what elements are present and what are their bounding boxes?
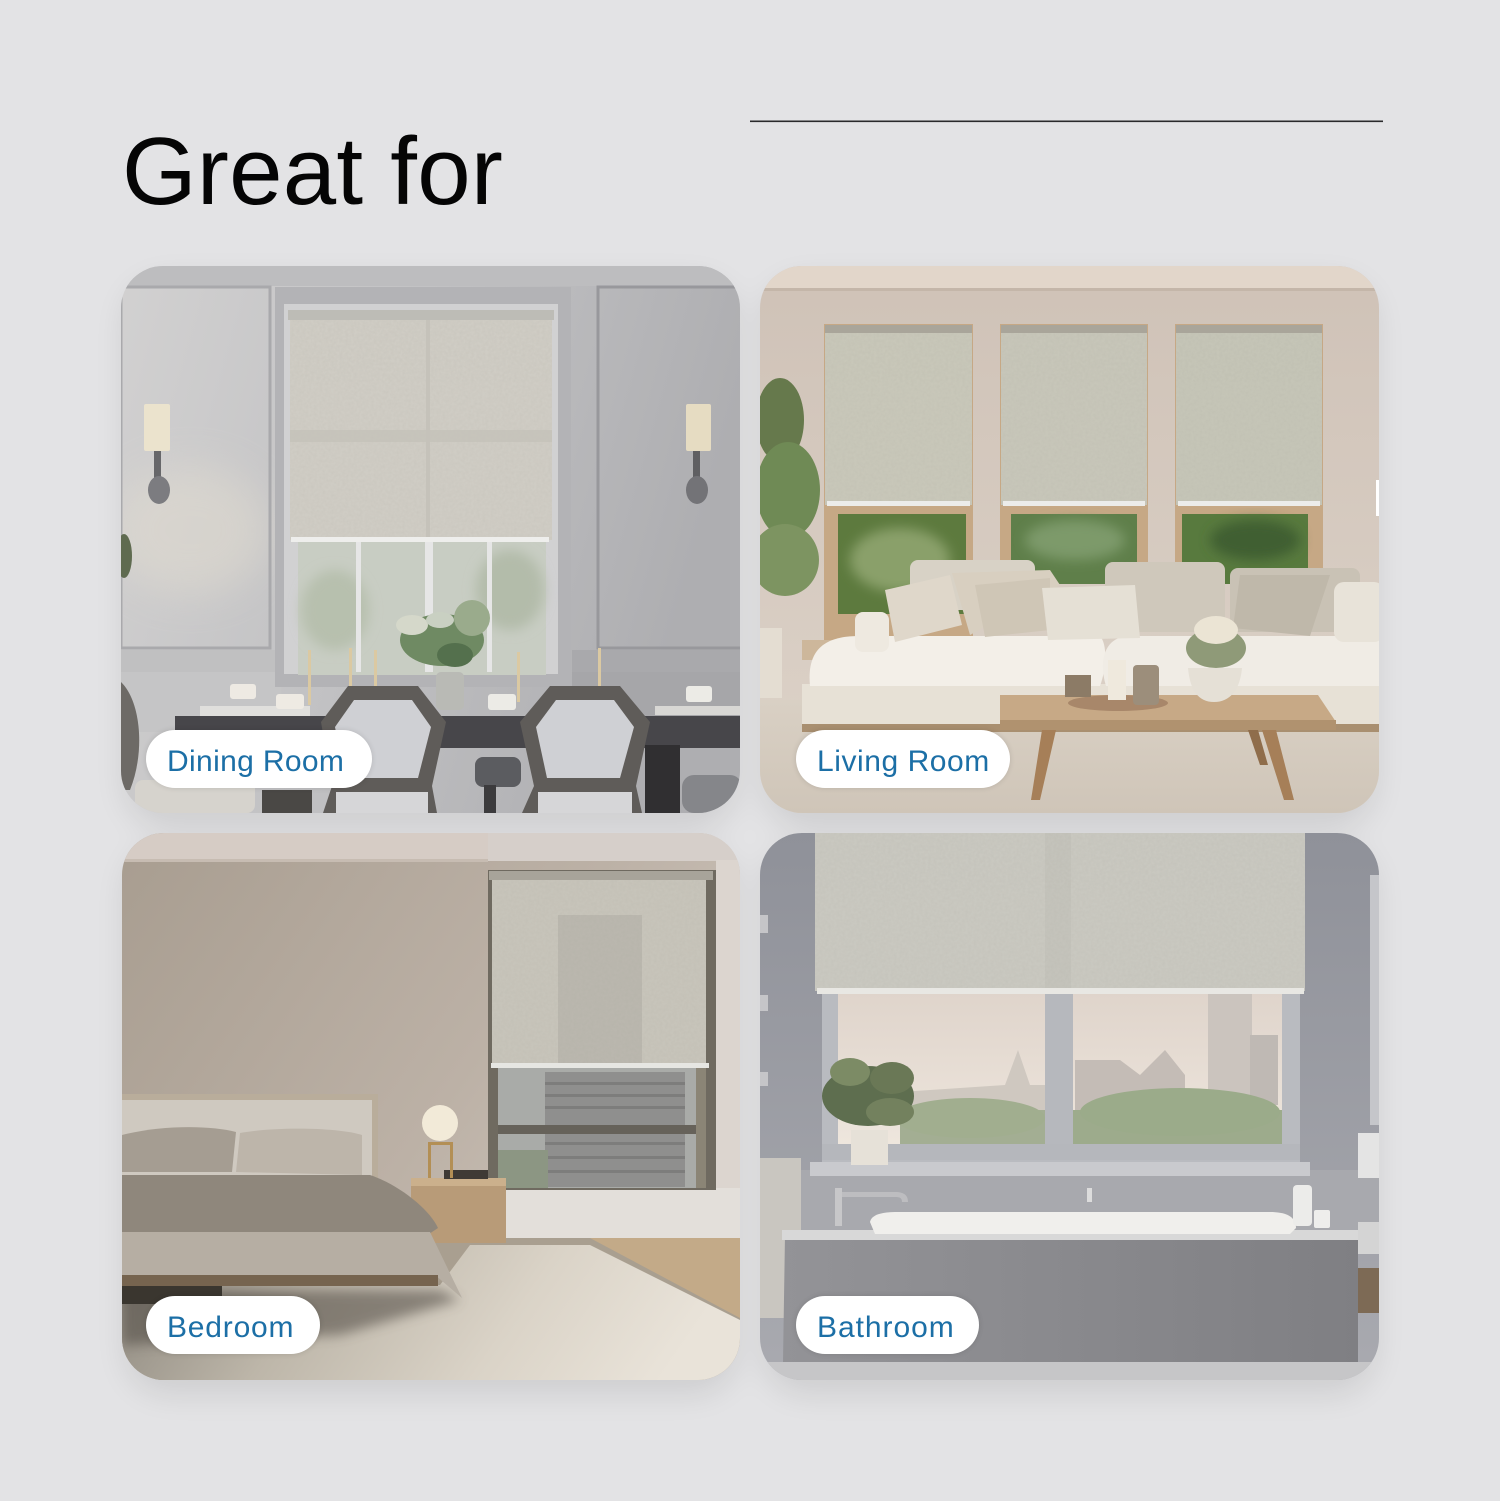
bedroom ledge: [506, 1188, 740, 1238]
panel: living room: [751, 266, 1384, 813]
plant at left edge: [121, 534, 132, 578]
label: Bathroom: Bathroom: [817, 1311, 955, 1344]
bedroom blind: [489, 871, 713, 1068]
card shadows: [125, 280, 1375, 1394]
windows: [824, 324, 1323, 640]
bedroom window: [488, 870, 716, 1190]
label: Living Room: [796, 730, 1010, 788]
panel: bedroom: [122, 833, 740, 1380]
bathtub: [782, 1185, 1359, 1362]
title: Great for: [122, 118, 503, 225]
panel: bathroom: [760, 833, 1379, 1380]
sconces: [144, 404, 170, 451]
bed: [122, 1094, 462, 1304]
bathroom sill: [810, 1162, 1310, 1176]
bedroom photo: [122, 833, 740, 1380]
label: Dining Room: [146, 730, 372, 788]
left cabinet: [760, 1158, 801, 1318]
planter: [760, 628, 782, 698]
dining room photo: [110, 266, 748, 813]
chair right: [520, 686, 650, 813]
dining blind: [290, 312, 552, 540]
bathroom photo: [760, 833, 1379, 1380]
tree: [760, 378, 820, 596]
label: Dining Room: Dining Room: [167, 745, 344, 778]
dining window frame: [275, 287, 571, 687]
flower arrangement: [396, 600, 490, 696]
chair left: [321, 686, 446, 813]
label: Living Room: Living Room: [817, 745, 990, 778]
nightstand and lamp: [411, 1105, 506, 1243]
bed shadow on rug: [122, 1290, 460, 1345]
header rule: [750, 120, 1383, 122]
bathroom window: [822, 990, 1300, 1162]
floor: [760, 749, 1379, 813]
table: [175, 716, 745, 748]
bedroom floor: [122, 1238, 740, 1380]
panel: dining room: [110, 266, 748, 813]
sofa: [802, 560, 1384, 732]
rug: [122, 1245, 740, 1380]
label: Bathroom: [796, 1296, 979, 1354]
coffee table: [1000, 616, 1336, 800]
bathroom blind: [815, 833, 1305, 994]
blinds: [825, 325, 1322, 506]
potted plant: [822, 1058, 914, 1165]
label: Bedroom: [146, 1296, 320, 1354]
label: Bedroom: Bedroom: [167, 1311, 294, 1344]
bathroom floor: [760, 1362, 1379, 1380]
living room photo: [751, 266, 1384, 813]
